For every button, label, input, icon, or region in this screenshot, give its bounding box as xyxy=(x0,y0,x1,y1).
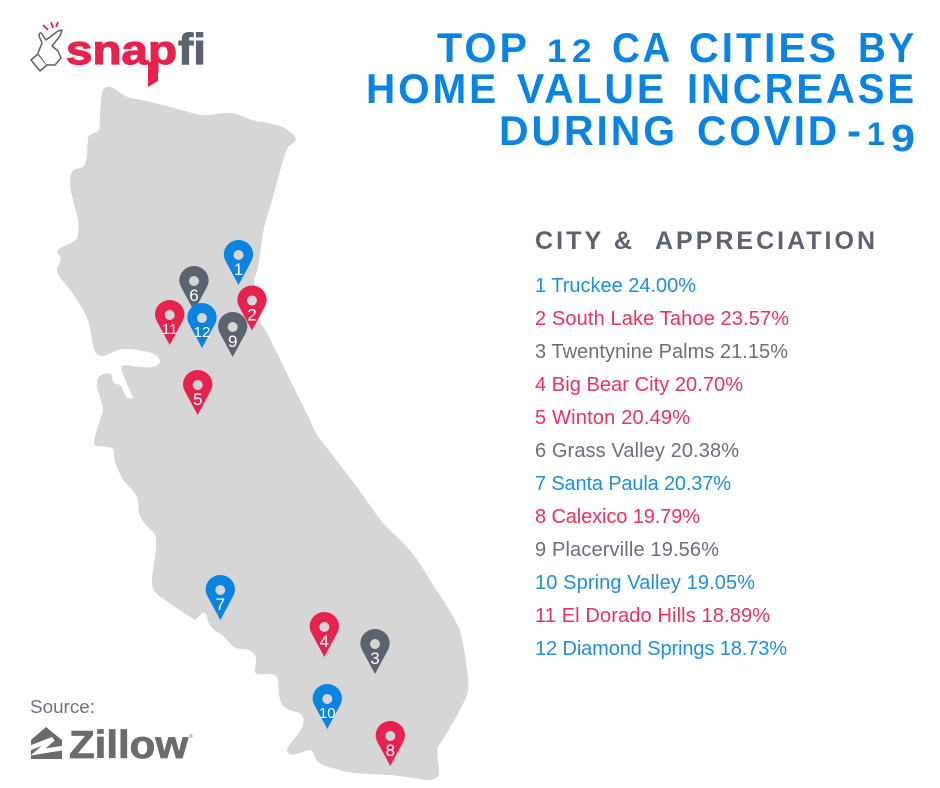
list heading: APPRECIATION xyxy=(655,227,878,255)
title: INCREASE xyxy=(687,65,917,112)
title xyxy=(366,24,917,160)
title: 12 xyxy=(547,33,597,69)
logo wordmark: fi xyxy=(178,25,206,74)
logo: snapfi xyxy=(31,22,206,87)
logo wordmark: snap xyxy=(66,27,177,73)
pin 12: 12 xyxy=(194,324,210,341)
pin 11: 11 xyxy=(162,321,177,338)
logo: Zillow xyxy=(30,724,193,767)
pin 3 xyxy=(360,629,390,674)
pin 5 xyxy=(183,370,212,415)
pin 6: 6 xyxy=(189,286,199,305)
ranked city list: 10 Spring Valley 19.05% xyxy=(535,572,755,594)
pin 8: 8 xyxy=(386,741,395,760)
ranked city list: 7 Santa Paula 20.37% xyxy=(535,473,731,495)
pin 11 xyxy=(155,300,184,345)
ranked city list: 11 El Dorado Hills 18.89% xyxy=(535,605,770,627)
pin 6 xyxy=(179,266,209,311)
title: CITIES xyxy=(689,24,839,71)
title: HOME xyxy=(366,65,499,112)
ranked city list: 9 Placerville 19.56% xyxy=(535,539,719,561)
pin 8 xyxy=(376,721,405,766)
title: 1 xyxy=(867,116,885,152)
ranked city list: 2 South Lake Tahoe 23.57% xyxy=(535,308,789,330)
ranked city list: 12 Diamond Springs 18.73% xyxy=(535,638,787,660)
title: - xyxy=(847,107,861,154)
Zillow wordmark: ® xyxy=(189,733,193,740)
title: COVID xyxy=(697,107,840,154)
pin 9 xyxy=(218,312,247,357)
pin 5: 5 xyxy=(193,390,202,409)
logo wordmark xyxy=(66,25,206,87)
list heading xyxy=(535,227,878,255)
list heading: CITY & xyxy=(535,227,635,255)
title: VALUE xyxy=(517,65,667,112)
title: 9 xyxy=(891,118,915,160)
ranked city list xyxy=(535,275,789,660)
pin 3: 3 xyxy=(370,649,380,668)
ranked city list: 5 Winton 20.49% xyxy=(535,407,690,429)
ranked city list: 8 Calexico 19.79% xyxy=(535,506,700,528)
ranked city list: 3 Twentynine Palms 21.15% xyxy=(535,341,788,363)
pin 10 xyxy=(313,684,342,729)
pin 7 xyxy=(206,575,235,620)
pin 10: 10 xyxy=(319,705,336,722)
source label: Source: xyxy=(30,697,95,717)
pin 7: 7 xyxy=(216,595,225,614)
title: BY xyxy=(858,24,917,71)
California outline xyxy=(57,87,468,780)
pin 12 xyxy=(187,303,217,348)
pin 1 xyxy=(224,240,253,285)
pin 2 xyxy=(237,286,267,330)
map of California with pins xyxy=(57,87,468,780)
title: CA xyxy=(612,24,673,71)
ranked city list: 1 Truckee 24.00% xyxy=(535,275,696,297)
ranked city list: 4 Big Bear City 20.70% xyxy=(535,374,743,396)
pin 4: 4 xyxy=(320,632,329,651)
Zillow wordmark: Zillow xyxy=(69,724,189,767)
pin 9: 9 xyxy=(228,332,237,351)
pin 2: 2 xyxy=(247,306,257,324)
pin 1: 1 xyxy=(234,260,243,279)
ranked city list: 6 Grass Valley 20.38% xyxy=(535,440,739,462)
icon: snapping fingers xyxy=(31,22,62,71)
icon: Zillow house xyxy=(30,727,63,759)
title: TOP xyxy=(437,24,530,71)
title: DURING xyxy=(499,107,678,154)
pin 4 xyxy=(310,612,339,657)
